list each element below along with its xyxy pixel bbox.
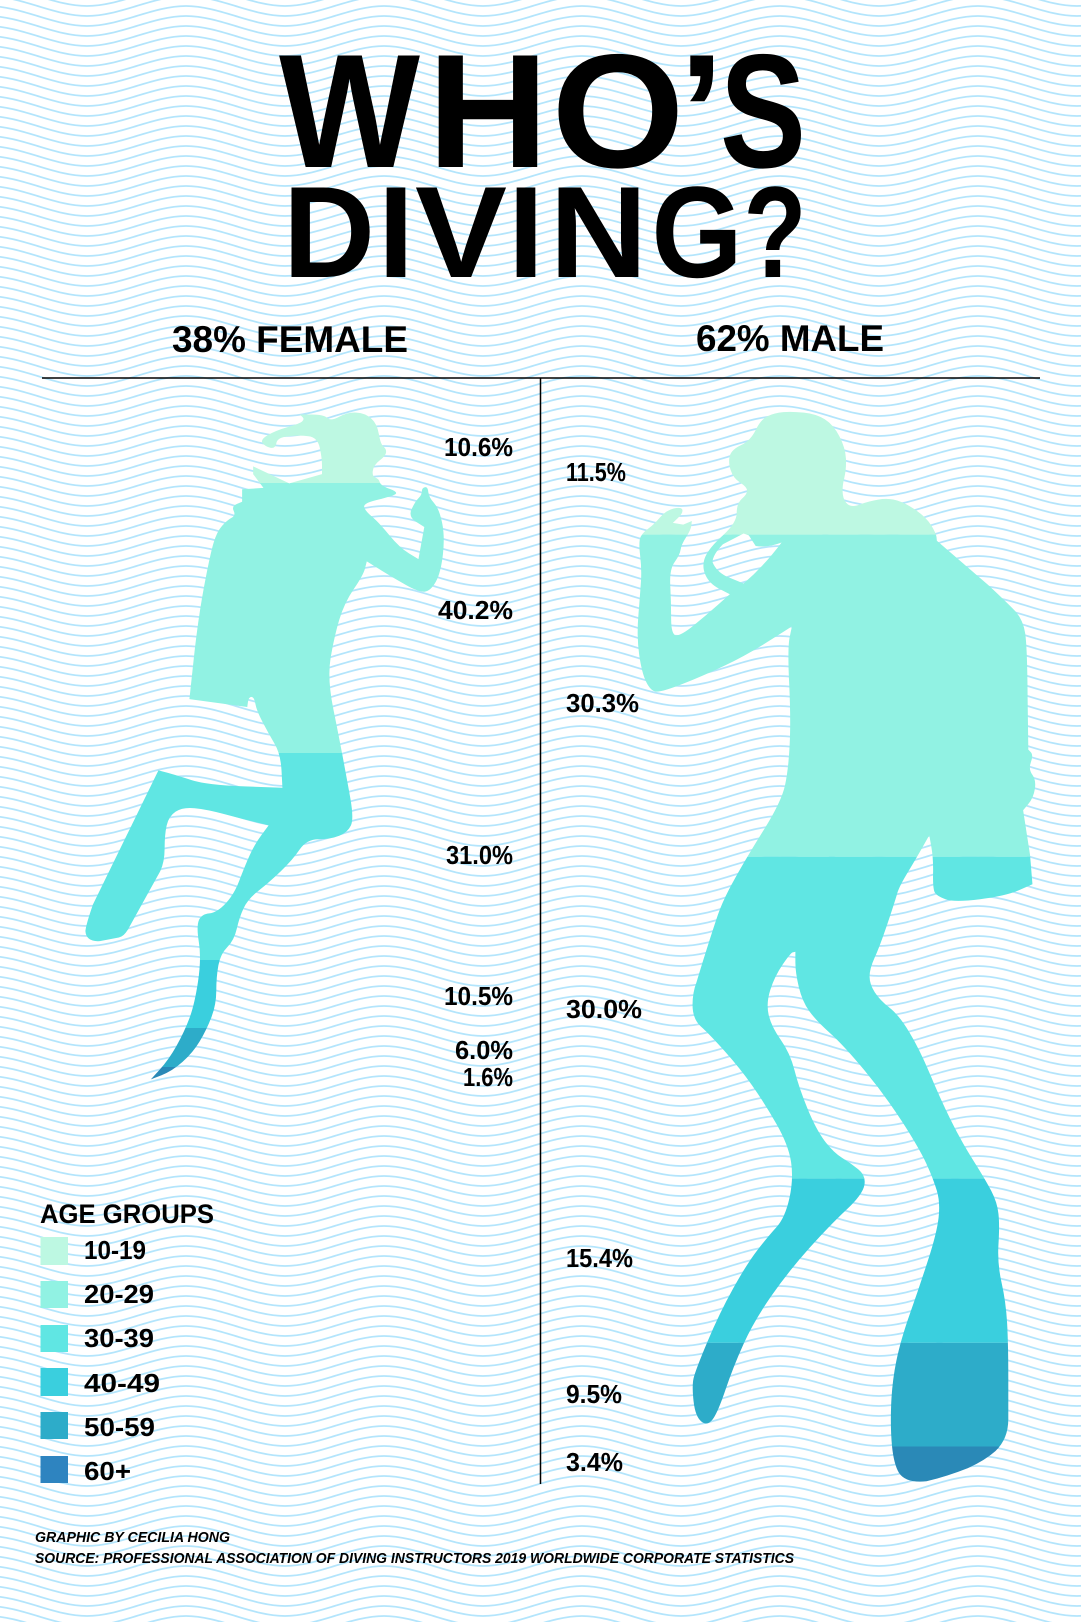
male percentages: 30.3% xyxy=(566,688,639,718)
divider lines xyxy=(42,378,1040,1484)
credit and source: GRAPHIC BY CECILIA HONG xyxy=(35,1530,230,1546)
title: S xyxy=(720,21,806,202)
title: ? xyxy=(744,159,806,305)
female percentages: 10.6% xyxy=(444,432,513,462)
title: D xyxy=(283,159,375,305)
legend: age groups: 20-29 xyxy=(84,1279,154,1309)
male percentages: 11.5% xyxy=(566,457,626,487)
male diver silhouette xyxy=(620,400,1050,1492)
female diver silhouette xyxy=(85,412,444,1080)
legend: age groups: 50-59 xyxy=(84,1412,155,1442)
female percentages: 40.2% xyxy=(438,595,513,625)
female percentages: 31.0% xyxy=(446,840,513,870)
legend: age groups xyxy=(40,1199,214,1486)
male percentages: 3.4% xyxy=(566,1447,623,1477)
credit and source xyxy=(35,1530,794,1567)
heading: 62% male: 62% MALE xyxy=(696,318,884,359)
credit and source: SOURCE: PROFESSIONAL ASSOCIATION OF DIVING INSTRUCTORS 2019 WORLDWIDE CORPORATE STATISTICS xyxy=(35,1551,794,1567)
title: W xyxy=(279,21,420,202)
female percentages xyxy=(438,432,513,1092)
title: G xyxy=(652,159,742,305)
title: I xyxy=(508,159,544,305)
heading: 38% female: 38% FEMALE xyxy=(172,319,408,360)
male percentages xyxy=(566,457,642,1477)
female percentages: 1.6% xyxy=(463,1062,513,1092)
legend: age groups: 60+ xyxy=(84,1456,131,1486)
male percentages: 15.4% xyxy=(566,1243,633,1273)
title: V xyxy=(415,159,507,305)
title xyxy=(279,21,806,305)
female percentages: 6.0% xyxy=(455,1035,513,1065)
legend: age groups: 10-19 xyxy=(84,1235,146,1265)
title: I xyxy=(378,159,414,305)
title: H xyxy=(428,21,548,202)
title: O xyxy=(552,21,684,202)
title: ’ xyxy=(679,21,724,202)
female percentages: 10.5% xyxy=(444,981,513,1011)
title: N xyxy=(550,159,648,305)
legend: age groups: 40-49 xyxy=(84,1368,160,1398)
male percentages: 9.5% xyxy=(566,1379,622,1409)
legend: age groups: AGE GROUPS xyxy=(40,1199,214,1229)
male percentages: 30.0% xyxy=(566,994,642,1024)
legend: age groups: 30-39 xyxy=(84,1323,154,1353)
